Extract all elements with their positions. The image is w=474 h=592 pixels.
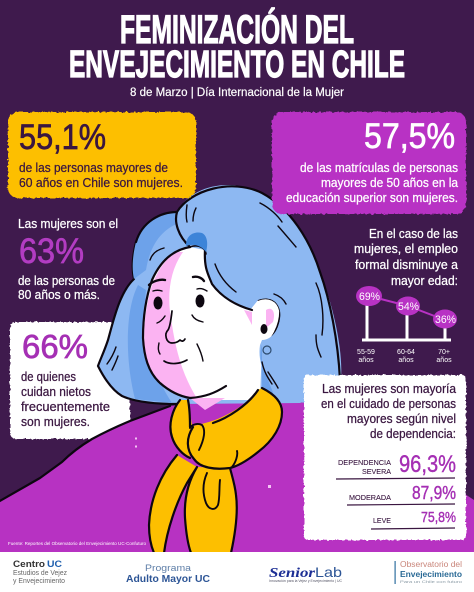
- panel: 57,5%: 57,5%: [364, 117, 455, 156]
- face outline: [143, 247, 190, 398]
- panel: 57,5%: [272, 112, 466, 214]
- small blouse dots: [135, 438, 271, 488]
- scarf folds: [190, 424, 237, 509]
- chart: empleo formal por edad: 55-59: [357, 349, 375, 356]
- chart: empleo formal por edad: 36%: [435, 314, 456, 326]
- hair back: [98, 185, 341, 404]
- nose: [166, 311, 185, 343]
- text block: 66%: frecuentemente: [21, 400, 110, 414]
- chart: empleo formal por edad: años: [398, 357, 414, 364]
- panel: cuidado según dependencia: en el cuidado de personas: [321, 397, 456, 411]
- illustration: older woman with scarf: [0, 185, 474, 553]
- chart: empleo formal por edad: 60-64: [397, 349, 415, 356]
- hair front fringe: [175, 186, 340, 403]
- panel: cuidado según dependencia: de dependencia:: [370, 427, 456, 441]
- logo: Programa Adulto Mayor UC: Programa: [145, 563, 191, 573]
- panel: cuidado según dependencia: 96,3%: [399, 451, 456, 478]
- logo: Centro UC: Centro: [13, 559, 46, 569]
- text block: 63%: Las mujeres son el: [18, 217, 118, 231]
- scarf tails: [149, 455, 197, 553]
- panel: cuidado según dependencia: mayores según nivel: [347, 412, 456, 426]
- hair strands: [107, 203, 323, 388]
- chart: empleo formal por edad: 54%: [398, 301, 419, 313]
- logo: SeniorLab: [269, 564, 343, 583]
- panel: cuidado según dependencia: 75,8%: [421, 509, 456, 526]
- panel: cuidado según dependencia: MODERADA: [349, 493, 391, 502]
- chart: empleo formal por edad: 70+: [438, 349, 450, 356]
- chart: empleo formal por edad: años: [358, 357, 374, 364]
- text block: empleo formal: formal disminuye a: [355, 258, 458, 272]
- logo: Observatorio del Envejecimiento: [394, 560, 462, 584]
- text block: 66%: de quienes: [21, 370, 76, 384]
- panel: 55,1%: 60 años en Chile son mujeres.: [19, 176, 183, 190]
- text block: 63%: de las personas de: [18, 274, 115, 288]
- body: purple blouse: [0, 395, 474, 553]
- source note: Fuente: Reportes del Observatorio del Envejecimiento UC-Confuturo: [8, 541, 146, 546]
- text block: empleo formal: [354, 227, 458, 288]
- panel: cuidado según dependencia: SEVERA: [362, 467, 391, 476]
- chart: empleo formal por edad: [356, 286, 457, 364]
- eyebrows: [149, 280, 165, 285]
- text block: empleo formal: En el caso de las: [369, 227, 458, 241]
- logo: Centro UC: y Envejecimiento: [13, 578, 65, 585]
- panel: cuidado según dependencia: DEPENDENCIA: [338, 458, 391, 467]
- ear detail and earring: [260, 324, 268, 334]
- panel: 55,1%: de las personas mayores de: [19, 161, 168, 175]
- logo: Programa Adulto Mayor UC: Adulto Mayor UC: [126, 574, 210, 585]
- logo: Centro UC: Estudios de Vejez: [13, 570, 67, 577]
- panel: 55,1%: [8, 112, 196, 198]
- eyes: [154, 296, 162, 310]
- logo: SeniorLab: Lab: [315, 564, 342, 580]
- text block: 66%: cuidan nietos: [21, 385, 91, 399]
- logo: Observatorio del Envejecimiento: Envejecimiento: [400, 569, 462, 579]
- panel background: 66%: [10, 322, 130, 439]
- hair tuft: [186, 233, 207, 252]
- logo: Centro UC: [13, 559, 67, 585]
- text block: empleo formal: mujeres, el empleo: [354, 242, 458, 256]
- title: [69, 6, 405, 86]
- text block: empleo formal: mayor edad:: [391, 274, 458, 288]
- scarf: [149, 388, 282, 553]
- logo: Observatorio del Envejecimiento: Observatorio del: [400, 560, 462, 569]
- footer: [0, 552, 474, 592]
- text block: 66%: [21, 328, 110, 429]
- panel: cuidado según dependencia: Las mujeres son mayoría: [322, 382, 456, 396]
- face and neck: [143, 247, 280, 400]
- wrinkles and smile: [157, 315, 203, 361]
- panel: 57,5%: educación superior son mujeres.: [286, 191, 458, 205]
- logo: Observatorio del Envejecimiento: Para un Chile con futuro: [400, 580, 462, 584]
- logo: Programa Adulto Mayor UC: [126, 563, 210, 585]
- subtitle: 8 de Marzo | Día Internacional de la Mujer: [130, 87, 344, 99]
- text block: 63%: 63%: [19, 232, 84, 271]
- panel: 55,1%: 55,1%: [19, 118, 106, 157]
- text block: 63%: [18, 217, 118, 302]
- text block: 66%: son mujeres.: [21, 415, 90, 429]
- chart: empleo formal por edad: 69%: [359, 291, 380, 303]
- text block: 63%: 80 años o más.: [18, 288, 100, 302]
- panel: cuidado según dependencia: 87,9%: [412, 483, 456, 503]
- panel: 57,5%: de las matrículas de personas: [300, 161, 458, 175]
- face shadow pink: [144, 252, 198, 400]
- logo: SeniorLab: Senior: [269, 566, 316, 581]
- logo: SeniorLab: Innovación para la Vejez y Envejecimiento | UC: [269, 579, 343, 583]
- panel: cuidado según dependencia: [304, 375, 466, 540]
- logo: Centro UC: UC: [47, 559, 63, 569]
- panel: cuidado según dependencia: LEVE: [373, 516, 391, 525]
- panel: 57,5%: mayores de 50 años en la: [321, 176, 458, 190]
- chart: empleo formal por edad: años: [436, 357, 452, 364]
- text block: 66%: 66%: [22, 328, 88, 365]
- scarf knot: [170, 400, 192, 458]
